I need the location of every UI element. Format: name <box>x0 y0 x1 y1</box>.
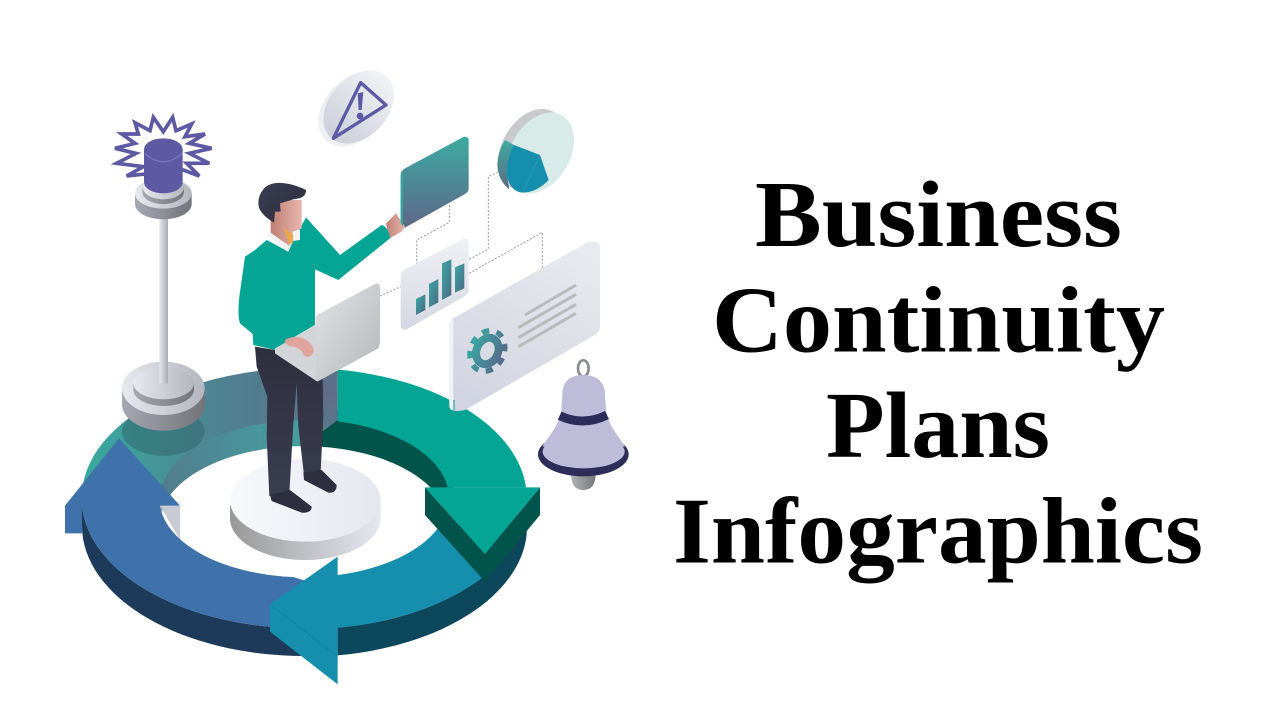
title line 2: Continuity <box>712 268 1165 372</box>
settings card <box>449 241 600 411</box>
bar chart card <box>401 238 469 330</box>
circular arrow ring <box>65 362 540 684</box>
ring back segment (translucent) <box>82 368 338 506</box>
title line 1: Business <box>755 163 1122 267</box>
blue band and arrowhead <box>65 438 304 628</box>
gear icon <box>463 325 511 377</box>
alarm beacon <box>115 117 212 383</box>
stand shadow <box>122 408 205 456</box>
beacon burst <box>115 117 212 176</box>
title line 3: Plans <box>826 374 1050 478</box>
left side wall <box>82 506 338 656</box>
hair <box>258 183 306 223</box>
green arrowhead <box>425 487 540 582</box>
sweater <box>238 217 390 350</box>
neck and head <box>267 200 302 252</box>
text lines <box>518 285 576 347</box>
inner wall left <box>160 420 320 512</box>
green band <box>338 370 526 487</box>
tablet left edge <box>401 173 403 227</box>
beacon base <box>135 175 192 219</box>
connector lines <box>380 172 542 296</box>
shoes <box>270 470 337 513</box>
person with laptop <box>238 183 390 513</box>
raised hand <box>386 213 405 238</box>
inner wall green <box>320 410 453 512</box>
beacon light <box>144 138 183 193</box>
bell <box>538 360 629 490</box>
title <box>673 163 1203 584</box>
floating dashboard elements <box>304 57 629 490</box>
laptop <box>275 283 380 382</box>
pole <box>159 217 168 383</box>
pie chart <box>484 97 588 205</box>
right side wall <box>338 507 527 655</box>
stand base <box>122 362 205 431</box>
tablet panel <box>401 137 469 228</box>
warning disc <box>304 57 408 161</box>
title line 4: Infographics <box>673 480 1203 584</box>
central platform <box>230 459 381 560</box>
grey inner arrow side <box>160 506 180 540</box>
teal band and arrowhead <box>270 513 526 684</box>
trousers <box>255 347 323 496</box>
segment end cap <box>320 380 338 433</box>
hand on laptop <box>285 337 314 357</box>
